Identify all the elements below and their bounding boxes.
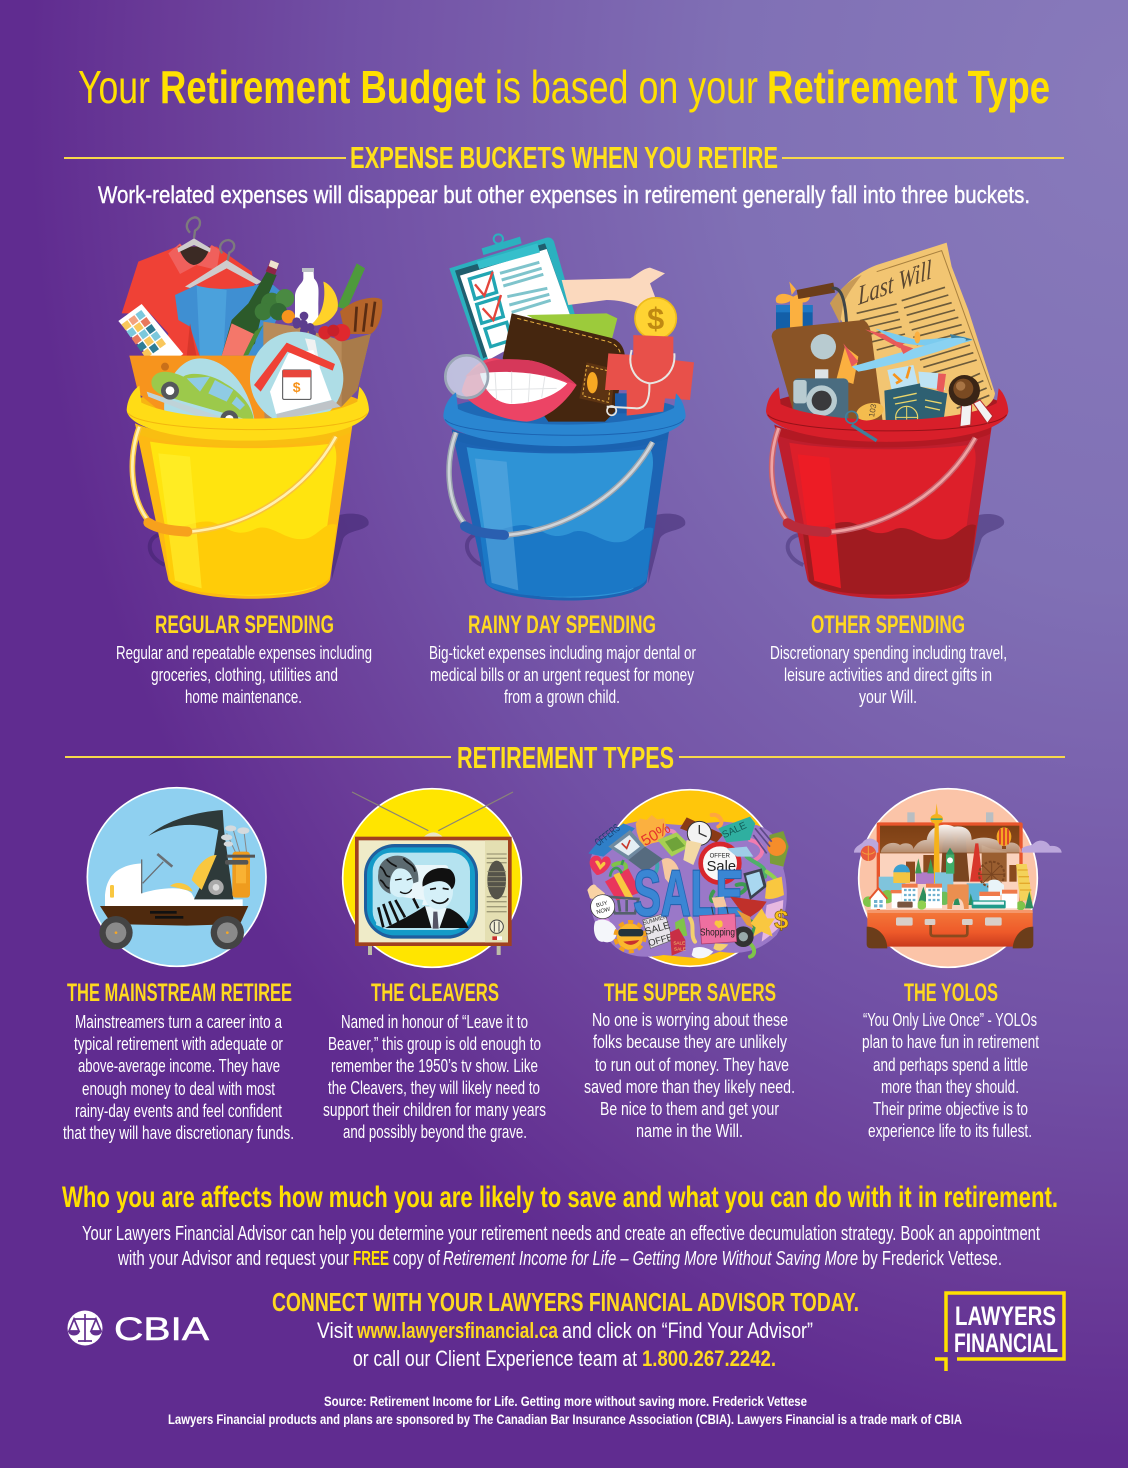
call to action: 1.800.267.2242. — [642, 1346, 776, 1371]
icon: sale doodle: SUMMER — [642, 914, 668, 927]
logo: Lawyers Financial: FINANCIAL — [954, 1328, 1058, 1358]
icon: keys with tag — [846, 400, 886, 441]
type: the yolos: and perhaps spend a little — [873, 1055, 1028, 1075]
bucket label: other spending: Discretionary spending including travel, — [770, 643, 1007, 663]
bucket label: other spending: OTHER SPENDING — [811, 611, 965, 639]
type: the cleavers: Named in honour of “Leave it to — [341, 1012, 528, 1032]
icon: red shirt on hanger — [122, 217, 260, 357]
panel: yellow bucket, regular spending — [118, 217, 382, 599]
type: the super savers: folks because they are unlikely — [593, 1032, 787, 1052]
icon: clipboard checklist — [449, 234, 575, 362]
icon: sale doodle: Shopping — [700, 928, 735, 939]
icon: groceries — [255, 263, 382, 422]
yellow bucket body — [127, 386, 369, 599]
icon: camera — [793, 369, 848, 422]
icon: sale doodle: SALE — [674, 947, 686, 952]
icon: wallet — [503, 313, 625, 422]
logo: CBIA — [68, 1310, 210, 1347]
heading: retirement types: RETIREMENT TYPES — [457, 740, 674, 775]
icon: sale doodle: SALE — [644, 920, 672, 938]
type: the cleavers — [323, 979, 546, 1142]
icon: medical cross and stethoscope — [605, 335, 694, 416]
red bucket handle — [772, 428, 975, 532]
blue bucket body — [443, 392, 686, 601]
bucket label: other spending: leisure activities and direct gifts in — [784, 665, 992, 685]
advisor text block: with your Advisor and request your — [117, 1248, 349, 1270]
icon: arm holding coin — [562, 268, 676, 339]
bucket label: rainy day spending: medical bills or an urgent request for money — [430, 665, 694, 685]
advisor text block: Retirement Income for Life – Getting More Without Saving More — [443, 1248, 858, 1270]
icon: house with calendar — [250, 332, 343, 425]
icon: sale doodle: OFFER — [710, 854, 731, 860]
panel: red bucket, other spending — [766, 243, 1008, 599]
blue bucket handle — [449, 432, 653, 535]
icon: smile with magnifier — [445, 355, 577, 422]
type: the yolos: Their prime objective is to — [873, 1099, 1028, 1119]
type: the mainstream retiree: typical retirement with adequate or — [74, 1034, 283, 1054]
icon: sale doodle: SALE — [633, 857, 743, 930]
type: the cleavers: THE CLEAVERS — [371, 979, 499, 1007]
call to action: and click on “Find Your Advisor” — [562, 1318, 813, 1343]
icon: sale doodle: SALE — [721, 820, 749, 841]
bucket label: regular spending — [116, 611, 372, 707]
bucket label: regular spending: REGULAR SPENDING — [155, 611, 334, 639]
type: the yolos: “You Only Live Once” - YOLOs — [863, 1010, 1037, 1030]
call to action — [272, 1287, 859, 1371]
type: the yolos: more than they should. — [881, 1077, 1019, 1097]
type: the mainstream retiree: THE MAINSTREAM RETIREE — [67, 979, 292, 1007]
bucket label: rainy day spending: from a grown child. — [504, 687, 620, 707]
title: is based on your — [495, 61, 758, 113]
icon: sale doodle: Sale — [707, 859, 736, 875]
icon: house with calendar: $ — [293, 379, 301, 395]
title — [78, 61, 1050, 113]
bucket label: regular spending: groceries, clothing, utilities and — [151, 665, 338, 685]
source footnote: Lawyers Financial products and plans are sponsored by The Canadian Bar Insurance Association (CBIA). Lawyers Financial is a trade mark of CBIA — [168, 1411, 962, 1427]
call to action: CONNECT WITH YOUR LAWYERS FINANCIAL ADVISOR TODAY. — [272, 1287, 859, 1317]
type: the mainstream retiree: above-average income. They have — [78, 1056, 280, 1076]
icon: sale doodle: NOW — [596, 906, 612, 916]
type: the mainstream retiree: Mainstreamers turn a career into a — [75, 1012, 283, 1032]
yellow bucket handle — [132, 427, 336, 532]
title: Your — [78, 61, 150, 113]
type: the yolos: THE YOLOS — [904, 979, 998, 1007]
bucket label: other spending: your Will. — [859, 687, 917, 707]
advisor text block: FREE — [353, 1248, 389, 1270]
type: the yolos: experience life to its fullest. — [868, 1121, 1032, 1141]
icon: last will document — [830, 243, 995, 427]
bucket label: other spending — [770, 611, 1007, 707]
icon: orange panel with car — [129, 356, 265, 428]
logo: Lawyers Financial: LAWYERS — [955, 1301, 1056, 1331]
call to action: www.lawyersfinancial.ca — [356, 1318, 559, 1343]
bucket label: rainy day spending — [429, 611, 696, 707]
bucket label: rainy day spending: RAINY DAY SPENDING — [468, 611, 656, 639]
bucket label: rainy day spending: Big-ticket expenses including major dental or — [429, 643, 696, 663]
type: the cleavers: remember the 1950’s tv show. Like — [331, 1056, 538, 1076]
icon: golf cart — [87, 788, 266, 966]
icon: sale doodle: 50% — [639, 820, 674, 850]
type: the cleavers: Beaver,” this group is old enough to — [328, 1034, 541, 1054]
icon: wax seal — [949, 375, 993, 427]
type: the super savers: to run out of money. They have — [595, 1055, 789, 1075]
logo: Lawyers Financial — [935, 1293, 1064, 1371]
type: the super savers: name in the Will. — [636, 1121, 743, 1141]
type: the super savers — [584, 979, 795, 1141]
type: the cleavers: support their children for many years — [323, 1100, 546, 1120]
panel: blue bucket, rainy day spending — [443, 234, 694, 601]
icon: wine bottle — [222, 260, 279, 356]
title: Retirement Type — [767, 61, 1050, 113]
advisor text block: by Frederick Vettese. — [862, 1248, 1002, 1270]
call to action: Visit — [317, 1318, 353, 1343]
type: the super savers: saved more than they likely need. — [584, 1077, 795, 1097]
title: Retirement Budget — [160, 61, 486, 113]
source footnote: Source: Retirement Income for Life. Getting more without saving more. Frederick Vettese — [324, 1393, 807, 1409]
bucket label: regular spending: Regular and repeatable expenses including — [116, 643, 372, 663]
icon: blue shirt on hanger — [175, 240, 287, 357]
icon: sale doodle: SALE — [673, 940, 685, 945]
type: the mainstream retiree: that they will have discretionary funds. — [63, 1123, 294, 1143]
heading: expense buckets: EXPENSE BUCKETS WHEN YOU RETIRE — [350, 140, 778, 175]
red bucket body — [766, 387, 1008, 599]
icon: arm holding coin: $ — [647, 302, 664, 336]
icon: last will document: Last Will — [857, 254, 932, 311]
type: the super savers: Be nice to them and get your — [600, 1099, 779, 1119]
logo: CBIA: CBIA — [114, 1311, 210, 1347]
icon: sale doodle — [587, 790, 789, 966]
type: the mainstream retiree: rainy-day events and feel confident — [75, 1101, 282, 1121]
icon: sale doodle: $ — [774, 904, 789, 934]
icon: phone — [118, 304, 183, 370]
advisor text block — [82, 1223, 1040, 1270]
source footnote — [168, 1393, 962, 1427]
type: the super savers: THE SUPER SAVERS — [604, 979, 776, 1007]
icon: sale doodle: BUY — [596, 900, 609, 909]
icon: suitcase with world landmarks — [854, 789, 1062, 967]
type: the cleavers: and possibly beyond the grave. — [343, 1122, 527, 1142]
icon: suitcase with gift — [772, 282, 883, 427]
icon: retro television — [343, 789, 521, 967]
bucket label: regular spending: home maintenance. — [185, 687, 302, 707]
icon: airplanes — [843, 328, 973, 372]
icon: keys with tag: 103 — [867, 403, 878, 418]
type: the super savers: No one is worrying about these — [592, 1010, 788, 1030]
icon: sale doodle: OFFER — [647, 930, 681, 948]
call to action: or call our Client Experience team at — [353, 1346, 637, 1371]
type: the yolos — [862, 979, 1039, 1141]
icon: sale doodle: OFFERS — [593, 822, 623, 849]
icon: passports and tickets — [884, 365, 947, 428]
type: the mainstream retiree — [63, 979, 294, 1143]
type: the cleavers: the Cleavers, they will likely need to — [328, 1078, 540, 1098]
type: the mainstream retiree: enough money to deal with most — [82, 1079, 275, 1099]
advisor text block: copy of — [393, 1248, 440, 1270]
type: the yolos: plan to have fun in retirement — [862, 1032, 1039, 1052]
